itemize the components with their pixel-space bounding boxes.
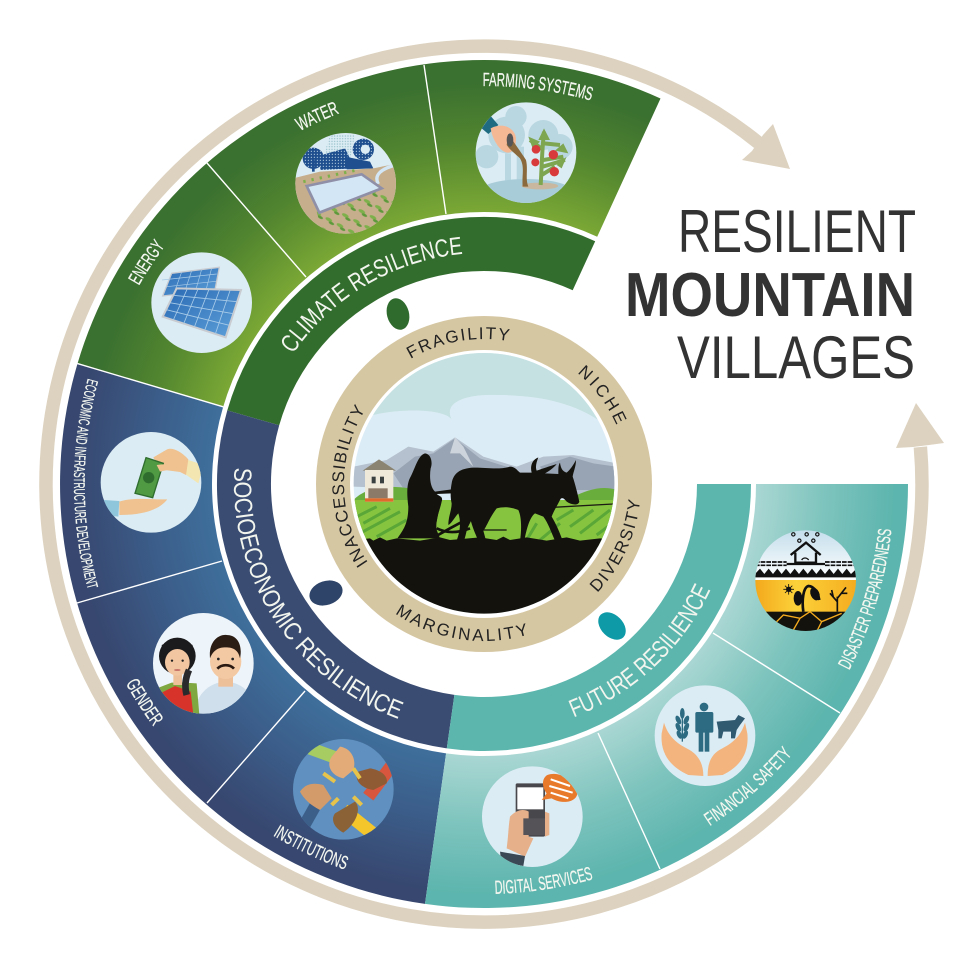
ring label: diversity: DIVERSITY: [590, 499, 640, 592]
panel: climate resilience outer sectors: [78, 60, 660, 407]
icon: farming tomato plant: [475, 102, 578, 205]
arrowhead: top right: [742, 124, 790, 169]
icon: water pond: [295, 133, 396, 234]
icon: joined hands: [292, 738, 395, 842]
oxen: [448, 457, 579, 541]
label: institutions: INSTITUTIONS: [274, 824, 348, 869]
band: socioeconomic resilience: [217, 410, 454, 748]
ground: [366, 536, 602, 614]
ellipse marker: future: [593, 607, 631, 645]
white rim of central scene: [350, 350, 618, 618]
band: future resilience: [447, 484, 751, 751]
house: [363, 459, 396, 471]
central scene: farmer ploughing with oxen: [353, 350, 617, 617]
panel: future outer sectors: [425, 484, 908, 908]
ring label: fragility: FRAGILITY: [406, 327, 510, 358]
band: climate resilience: [227, 217, 595, 425]
label: energy: ENERGY: [128, 238, 164, 286]
label: water: WATER: [294, 102, 340, 130]
icon: money exchange: [100, 432, 203, 535]
title: resilient mountain villages: MOUNTAIN: [625, 261, 915, 330]
ellipse marker: socioeconomic: [306, 576, 346, 610]
central beige ring: [316, 316, 652, 652]
sector dividers: [77, 65, 840, 869]
label: digital services: DIGITAL SERVICES: [495, 867, 592, 894]
upper cloud: [373, 353, 598, 420]
heading: socioeconomic resilience: SOCIOECONOMIC RESILIENCE: [234, 468, 404, 719]
icon: phone in hand: [482, 766, 585, 869]
ring label: inaccessibility: INACCESSIBILITY: [332, 404, 368, 568]
label: economic and infrastructure development: ECONOMIC AND INFRASTRUCTURE DEVELOPMENT: [74, 378, 98, 588]
title: resilient mountain villages: [625, 198, 916, 391]
plough: [436, 496, 471, 536]
label: gender: GENDER: [127, 679, 163, 726]
ellipse marker: climate: [383, 296, 413, 332]
arrowhead: right: [896, 403, 944, 448]
ring label: niche: NICHE: [578, 365, 627, 424]
label: farming systems: FARMING SYSTEMS: [484, 72, 594, 100]
heading: climate resilience: CLIMATE RESILIENCE: [282, 236, 462, 351]
heading: future resilience: FUTURE RESILIENCE: [568, 583, 710, 717]
label: financial safety: FINANCIAL SAFETY: [703, 746, 790, 826]
icon: woman and man: [153, 613, 254, 714]
ring label: marginality: MARGINALITY: [396, 604, 526, 642]
panel: socioeconomic outer sectors: [60, 364, 446, 904]
icon: hands protecting person, wheat and goat: [654, 685, 757, 788]
label: disaster preparedness: DISASTER PREPAREDNESS: [838, 528, 892, 670]
title: resilient mountain villages: VILLAGES: [677, 324, 915, 391]
fields: [353, 487, 410, 547]
icon: flood and drought: [755, 530, 858, 632]
farmer: [397, 453, 452, 538]
icon: solar panels: [151, 252, 252, 353]
